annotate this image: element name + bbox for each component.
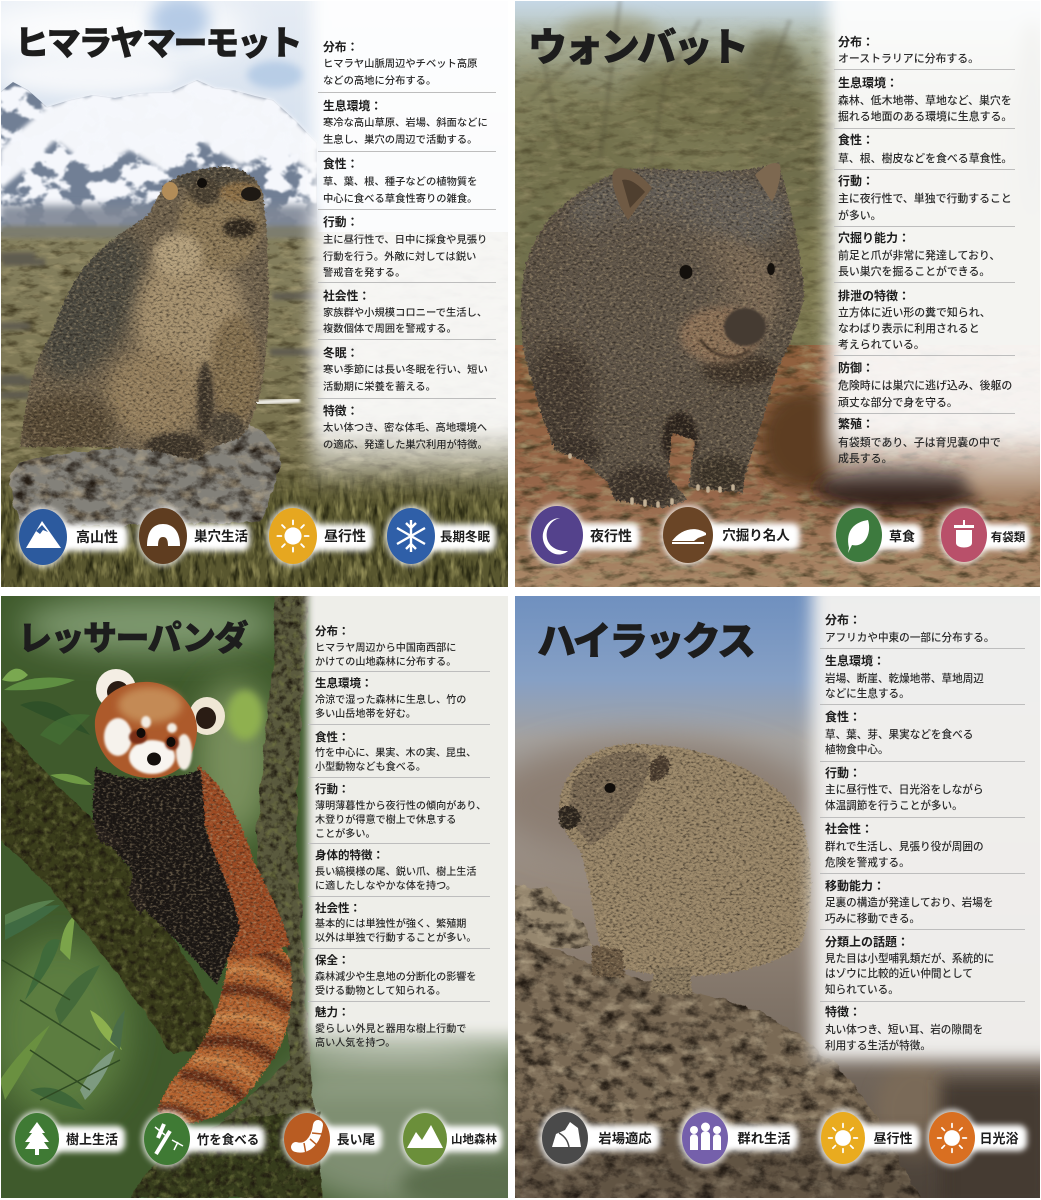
- badge: herbivore: 草食: [889, 529, 915, 544]
- badge: group living: [679, 1109, 798, 1167]
- badge: nocturnal: [529, 504, 640, 566]
- mossy tree trunk and branch: [0, 595, 322, 1200]
- section: habitat: [825, 653, 984, 700]
- section: diet: [825, 709, 973, 756]
- section: distribution: ヒマラヤ山脈周辺やチベット高原: [323, 57, 477, 70]
- section: sociality: 以外は単独で行動することが多い。: [315, 931, 476, 944]
- section: body features: 長い縞模様の尾、鋭い爪、樹上生活: [315, 865, 476, 878]
- section: habitat: 冷涼で湿った森林に生息し、竹の: [315, 693, 466, 706]
- section: behavior: [315, 782, 486, 840]
- section: diet: [323, 157, 477, 205]
- section: conservation: 受ける動物として知られる。: [315, 984, 446, 997]
- badge: burrow: [137, 506, 250, 566]
- section: body features: に適したしなやかな体を持つ。: [315, 879, 456, 892]
- section: habitat: 森林、低木地帯、草地など、巣穴を: [838, 93, 1012, 107]
- section: distribution: などの高地に分布する。: [323, 74, 436, 87]
- panel: Himalayan marmot: [0, 0, 527, 592]
- info panel background: [828, 0, 1041, 495]
- section: taxonomy: [825, 935, 994, 996]
- section: distribution: [323, 40, 477, 87]
- red panda head: [95, 669, 225, 778]
- section: behavior: [323, 215, 487, 279]
- section: habitat: 生息環境：: [315, 676, 372, 690]
- title: ウォンバット: [528, 27, 746, 70]
- section: hibernation: [323, 346, 488, 393]
- hyrax eye: [604, 783, 616, 793]
- title: ヒマラヤマーモット: [15, 25, 300, 63]
- section: behavior: が多い。: [838, 208, 882, 222]
- red panda body: [92, 765, 290, 985]
- badge: long hibernation: 長期冬眠: [440, 529, 490, 544]
- section: digging: 長い巣穴を掘ることができる。: [838, 264, 990, 278]
- section: features: の適応、発達した巣穴利用が特徴。: [323, 438, 488, 451]
- section: diet: 食性：: [825, 709, 861, 724]
- section: behavior: 主に夜行性で、単独で行動すること: [838, 191, 1012, 205]
- section: diet: 草、葉、根、種子などの植物質を: [323, 175, 477, 188]
- section: diet: [315, 730, 476, 773]
- section: behavior: 薄明薄暮性から夜行性の傾向があり、: [315, 799, 486, 812]
- section: behavior: [825, 765, 983, 812]
- section: sociality: 社会性：: [315, 901, 361, 915]
- section: mobility: 巧みに移動できる。: [825, 912, 920, 925]
- section: distribution: [825, 612, 994, 644]
- section: conservation: 保全：: [315, 953, 350, 967]
- section: body features: 身体的特徴：: [315, 848, 384, 862]
- section: defense: 頑丈な部分で身を守る。: [838, 395, 958, 409]
- badge: diurnal: [267, 506, 373, 566]
- badge: digging expert: 穴掘り名人: [722, 527, 790, 543]
- info text column: [820, 612, 1025, 1052]
- background: forest: [0, 595, 540, 1200]
- badge: alpine: [17, 507, 128, 567]
- badge: long tail: 長い尾: [337, 1132, 375, 1147]
- section: digging: 穴掘り能力：: [838, 230, 910, 245]
- section: distribution: かけての山地森林に分布する。: [315, 655, 456, 668]
- hyrax: [558, 744, 811, 995]
- section: breeding: 有袋類であり、子は育児嚢の中で: [838, 435, 1001, 449]
- section: behavior: 主に昼行性で、日光浴をしながら: [825, 783, 983, 796]
- title: ハイラックス: [537, 621, 754, 664]
- section: sociality: [315, 901, 476, 944]
- section: excretion: 排泄の特徴：: [838, 288, 910, 303]
- panel: hyrax: [490, 580, 1041, 1200]
- section: behavior: 体温調節を行うことが多い。: [825, 799, 963, 812]
- section: distribution: アフリカや中東の一部に分布する。: [825, 631, 994, 644]
- section: habitat: [315, 676, 466, 720]
- section: sociality: 家族群や小規模コロニーで生活し、: [323, 306, 487, 319]
- rock: [10, 423, 281, 528]
- section: behavior: 行動を行う。外敵に対しては鋭い: [323, 250, 476, 263]
- badge: diurnal: 昼行性: [873, 1131, 913, 1146]
- badge: arboreal: 樹上生活: [66, 1132, 118, 1147]
- section: taxonomy: 分類上の話題：: [825, 935, 909, 949]
- section: sociality: 複数個体で周囲を警戒する。: [323, 322, 457, 335]
- section: hibernation: 冬眠：: [323, 346, 358, 360]
- section: sociality: 基本的には単独性が強く、繁殖期: [315, 917, 466, 930]
- section: excretion: 考えられている。: [838, 338, 925, 351]
- panel: wombat: [505, 0, 1041, 590]
- section: hibernation: 活動期に栄養を蓄える。: [323, 380, 436, 393]
- wombat ears: [612, 163, 781, 220]
- section: features: 特徴：: [825, 1004, 861, 1019]
- section: behavior: [838, 173, 1012, 222]
- wombat claws: [570, 455, 733, 506]
- badge: arboreal: [13, 1111, 125, 1167]
- section: excretion: [838, 288, 991, 351]
- wombat: [520, 162, 805, 508]
- section: mobility: 足裏の構造が発達しており、岩場を: [825, 896, 993, 909]
- section: breeding: 成長する。: [838, 451, 892, 465]
- info panel background: [312, 0, 527, 490]
- section: taxonomy: はゾウに比較的近い仲間として: [825, 967, 973, 980]
- section: features: [825, 1004, 983, 1052]
- badge: marsupial: 有袋類: [991, 530, 1026, 544]
- section: diet: 草、葉、芽、果実などを食べる: [825, 728, 973, 741]
- section: diet: [838, 134, 1006, 164]
- section: mobility: [825, 878, 993, 925]
- section: distribution: 分布：: [838, 34, 874, 49]
- section: diet: 食性：: [838, 132, 874, 147]
- section: excretion: なわばり表示に利用されると: [838, 321, 980, 335]
- section: diet: 食性：: [315, 730, 350, 744]
- section: habitat: などに生息する。: [825, 687, 910, 700]
- badge: alpine: 高山性: [76, 529, 118, 545]
- section: digging: 前足と爪が非常に発達しており、: [838, 248, 1000, 262]
- section: features: 利用する生活が特徴。: [825, 1039, 931, 1052]
- section: defense: 防御：: [838, 360, 874, 375]
- background: blue sky and blurred rocky slope: [490, 595, 1041, 1200]
- section: body features: [315, 848, 476, 892]
- section: distribution: ヒマラヤ周辺から中国南西部に: [315, 641, 456, 654]
- badge: burrow: 巣穴生活: [194, 528, 248, 544]
- badge: herbivore: [834, 506, 922, 564]
- section: habitat: 生息環境：: [825, 653, 885, 668]
- section: habitat: 寒冷な高山草原、岩場、斜面などに: [323, 116, 488, 129]
- section: diet: 中心に食べる草食性寄りの雑食。: [323, 192, 477, 205]
- badge: group living: 群れ生活: [737, 1130, 791, 1146]
- rocks: [510, 885, 925, 1200]
- section: conservation: 森林減少や生息地の分断化の影響を: [315, 970, 476, 983]
- badge: long hibernation: [385, 506, 496, 566]
- background: sky, trees and soil: [505, 0, 1041, 590]
- section: diet: 草、根、樹皮などを食べる草食性。: [838, 151, 1012, 165]
- section: habitat: [838, 75, 1012, 123]
- section: habitat: [323, 99, 488, 146]
- info text column: [318, 40, 496, 451]
- section: sociality: 危険を警戒する。: [825, 856, 910, 869]
- section: behavior: 行動：: [825, 765, 861, 780]
- section: behavior: 行動：: [323, 215, 358, 229]
- section: sociality: 社会性：: [323, 289, 370, 303]
- bamboo leaves: [0, 669, 125, 1110]
- marmot ear, eye and nose: [162, 178, 261, 201]
- section: taxonomy: 見た目は小型哺乳類だが、系統的に: [825, 952, 994, 965]
- section: habitat: 生息し、巣穴の周辺で活動する。: [323, 133, 477, 146]
- section: appeal: [315, 1005, 466, 1049]
- badge: digging expert: [661, 505, 800, 565]
- section: features: 特徴：: [323, 404, 358, 418]
- badge: rock adapted: 岩場適応: [598, 1130, 652, 1146]
- badge: long tail: [282, 1111, 382, 1167]
- section: breeding: 繁殖：: [838, 416, 874, 431]
- info panel background: [307, 585, 522, 1075]
- section: features: [323, 404, 488, 451]
- badge: eats bamboo: 竹を食べる: [197, 1132, 259, 1147]
- info panel background: [812, 580, 1041, 1060]
- section: hibernation: 寒い季節には長い冬眠を行い、短い: [323, 363, 488, 376]
- badge: rock adapted: [539, 1109, 660, 1167]
- section: behavior: ことが多い。: [315, 827, 376, 840]
- badge: mountain forest: 山地森林: [451, 1132, 497, 1146]
- section: appeal: 愛らしい外見と器用な樹上行動で: [315, 1022, 466, 1035]
- badge: marsupial: [939, 506, 1030, 564]
- section: sociality: [825, 821, 984, 869]
- badge: mountain forest: [401, 1111, 502, 1167]
- section: appeal: 高い人気を持つ。: [315, 1036, 395, 1049]
- section: sociality: [323, 289, 487, 335]
- badge: sunbathing: [927, 1109, 1027, 1167]
- section: appeal: 魅力：: [315, 1005, 350, 1019]
- section: distribution: 分布：: [825, 612, 861, 627]
- section: behavior: 主に昼行性で、日中に採食や見張り: [323, 233, 487, 246]
- section: distribution: [315, 624, 456, 668]
- marmot: [19, 166, 270, 461]
- section: distribution: [838, 36, 972, 64]
- wombat face: [680, 263, 775, 357]
- badge: diurnal: [818, 1109, 920, 1167]
- section: behavior: 行動：: [315, 782, 350, 796]
- panel: red panda: [0, 585, 540, 1200]
- section: distribution: 分布：: [323, 40, 358, 54]
- section: features: 太い体つき、密な体毛、高地環境へ: [323, 421, 487, 434]
- section: diet: 竹を中心に、果実、木の実、昆虫、: [315, 746, 476, 759]
- badge: diurnal: 昼行性: [324, 528, 366, 544]
- section: defense: 危険時には巣穴に逃げ込み、後躯の: [838, 378, 1012, 392]
- section: sociality: 社会性：: [825, 821, 873, 836]
- section: distribution: オーストラリアに分布する。: [838, 51, 979, 65]
- section: taxonomy: 知られている。: [825, 983, 899, 996]
- section: habitat: 生息環境：: [323, 99, 382, 113]
- section: sociality: 群れで生活し、見張り役が周囲の: [825, 840, 984, 853]
- info text column: [834, 34, 1015, 465]
- section: mobility: 移動能力：: [825, 878, 885, 893]
- info text column: [308, 624, 490, 1049]
- section: behavior: 行動：: [838, 173, 874, 188]
- section: features: 丸い体つき、短い耳、岩の隙間を: [825, 1023, 983, 1036]
- section: diet: 小型動物なども食べる。: [315, 760, 426, 773]
- badge: sunbathing: 日光浴: [979, 1131, 1019, 1146]
- section: diet: 植物食中心。: [825, 743, 889, 756]
- section: habitat: 生息環境：: [838, 75, 898, 90]
- section: diet: 食性：: [323, 157, 358, 171]
- section: behavior: 警戒音を発する。: [323, 266, 405, 279]
- title: レッサーパンダ: [18, 619, 248, 658]
- section: conservation: [315, 953, 476, 997]
- section: habitat: 掘れる地面のある環境に生息する。: [838, 109, 1012, 123]
- badge: nocturnal: 夜行性: [590, 528, 632, 544]
- section: habitat: 多い山岳地帯を好む。: [315, 707, 416, 720]
- section: distribution: 分布：: [315, 624, 350, 638]
- section: breeding: [838, 416, 1001, 465]
- section: behavior: 木登りが得意で樹上で休息する: [315, 813, 456, 826]
- section: digging: [838, 232, 994, 276]
- rock shadow: [515, 1130, 945, 1200]
- section: excretion: 立方体に近い形の糞で知られ、: [838, 305, 991, 319]
- badge: eats bamboo: [142, 1111, 265, 1167]
- red panda tail: [140, 900, 310, 1140]
- section: habitat: 岩場、断崖、乾燥地帯、草地周辺: [825, 672, 984, 685]
- background: sky, snowy mountains and grassland: [0, 0, 510, 592]
- section: defense: [838, 360, 1012, 409]
